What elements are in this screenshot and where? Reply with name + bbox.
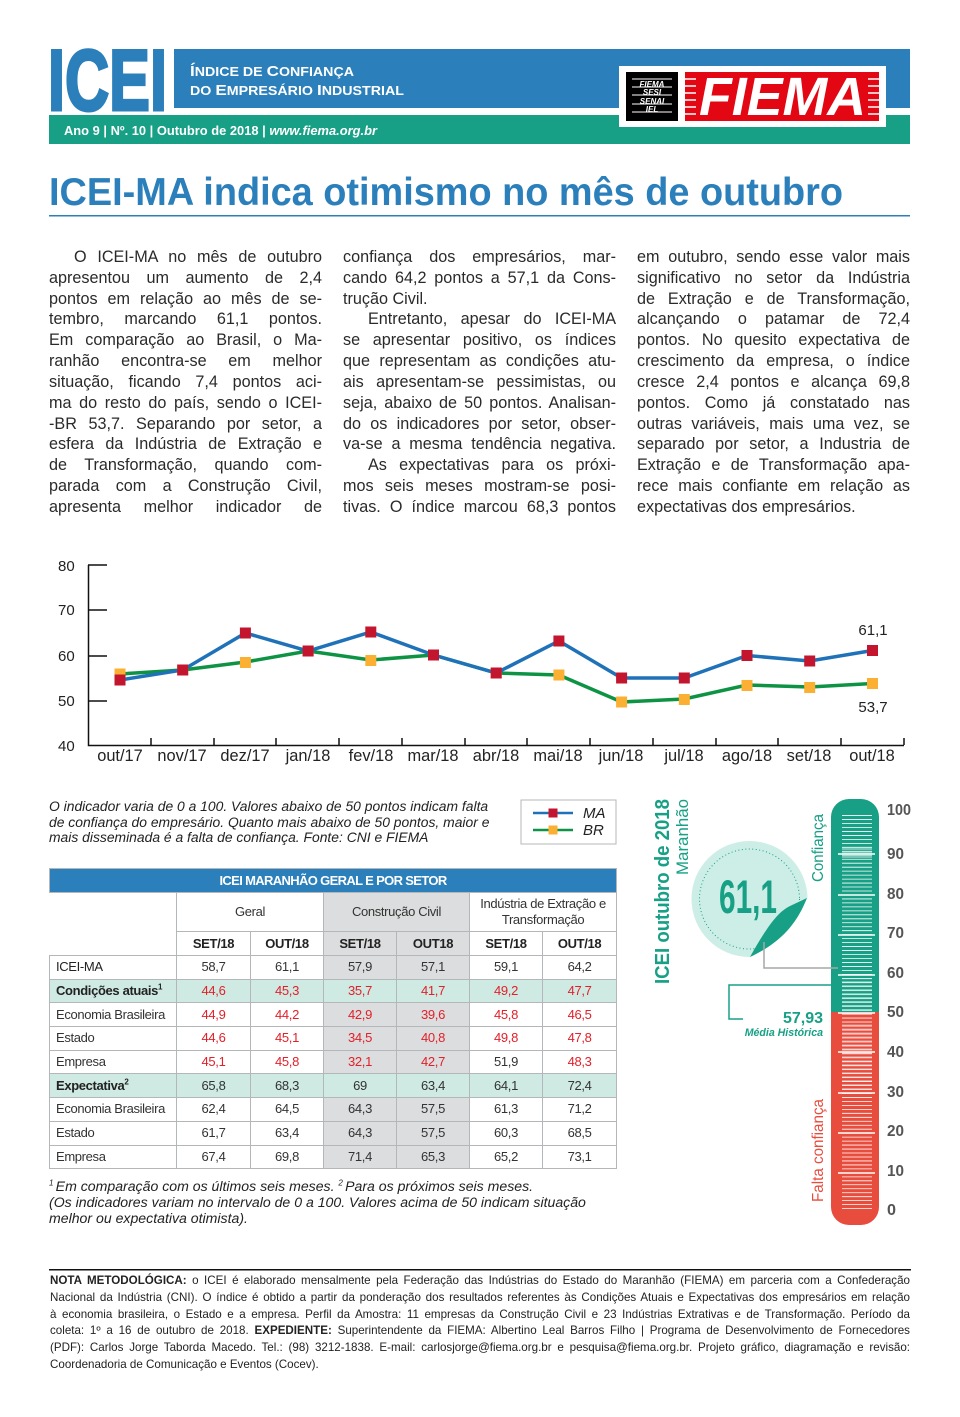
article column 1: situação, ficando 7,4 pontos aci- [49, 373, 322, 391]
x axis labels: out/17 [97, 747, 143, 765]
table: ICEI Maranhão by sector: 69 [353, 1078, 367, 1093]
article column 3: Extração e de Transformação apa- [637, 456, 910, 474]
divider [49, 1269, 911, 1270]
scale numbers: 100 [887, 802, 911, 819]
methodology note [50, 1273, 910, 1371]
rotated panel titles [652, 799, 692, 984]
article column 2: confiança dos empresários, mar- [343, 248, 616, 266]
table: ICEI Maranhão by sector: 61,1 [275, 959, 299, 974]
scale numbers: 60 [887, 965, 904, 982]
scale numbers: 0 [887, 1202, 896, 1219]
FIEMA logo: FIEMA [640, 80, 665, 89]
table: ICEI Maranhão by sector: 40,8 [421, 1030, 445, 1045]
legend [520, 800, 616, 844]
table: ICEI Maranhão by sector: 64,2 [568, 959, 591, 974]
article column 3: em outubro, sendo esse valor mais [637, 248, 910, 266]
methodology note: coleta: 1º a 16 de outubro de 2018. EXPEDIENTE: Superintendente da FIEMA: Albertino Leal Barros Filho | Programa de Desenvolvimento de Fornecedores [50, 1324, 910, 1337]
main title: ICEI-MA indica otimismo no mês de outubro [49, 171, 843, 214]
table: ICEI Maranhão by sector: 61,3 [494, 1101, 518, 1116]
header banner [48, 40, 910, 144]
thermometer bar [831, 799, 879, 1225]
scale numbers: 70 [887, 925, 904, 942]
scale numbers: 30 [887, 1084, 904, 1101]
article column 2: seja, abaixo de 50 pontos. Analisan- [343, 394, 616, 412]
table: ICEI Maranhão by sector: 60,3 [494, 1125, 518, 1140]
article column 2: trução Civil. [343, 290, 428, 308]
article column 3: outras variáveis, mais uma vez, se [637, 415, 910, 433]
table: ICEI Maranhão by sector: 65,2 [494, 1149, 518, 1164]
table: ICEI Maranhão by sector: 69,8 [275, 1149, 299, 1164]
green edition band [49, 115, 910, 144]
table: ICEI Maranhão by sector: Estado [56, 1030, 94, 1045]
article column 1: parada com a Construção Civil, [49, 477, 322, 495]
connector: historical mean [729, 985, 832, 1019]
table: ICEI Maranhão by sector: 46,5 [568, 1007, 591, 1022]
article column 1: esfera da Indústria de Extração e [49, 435, 322, 453]
table footnotes: melhor ou expectativa otimista). [49, 1210, 248, 1226]
confidence thermometer panel [652, 799, 911, 1225]
article column 3: significativo no setor da Indústria [637, 269, 910, 287]
table: ICEI Maranhão by sector: 49,2 [494, 983, 518, 998]
scale numbers: 10 [887, 1163, 904, 1180]
table: ICEI Maranhão by sector: 62,4 [202, 1101, 225, 1116]
table: ICEI Maranhão by sector: Transformação [502, 912, 584, 927]
table: ICEI Maranhão by sector: 45,1 [275, 1030, 299, 1045]
FIEMA logo [619, 66, 886, 127]
article column 3: pontos. No quesito expectativa de [637, 331, 910, 349]
table: ICEI Maranhão by sector: 45,8 [275, 1054, 299, 1069]
badge: 61,1 [692, 841, 812, 962]
table: ICEI Maranhão by sector: 59,1 [494, 959, 518, 974]
table: ICEI Maranhão by sector: 44,6 [202, 983, 225, 998]
edition line: Ano 9 | Nº. 10 | Outubro de 2018 | www.fiema.org.br [64, 124, 378, 138]
table: ICEI Maranhão by sector: 65,8 [202, 1078, 225, 1093]
article column 3: cresce 2,4 pontos e alcança 69,8 [637, 373, 910, 391]
methodology note: Coordenadoria de Comunicação e Eventos (Cocev). [50, 1358, 319, 1371]
table: ICEI Maranhão by sector: 57,9 [348, 959, 372, 974]
table: ICEI Maranhão by sector: 48,3 [568, 1054, 591, 1069]
axes [88, 565, 904, 746]
table: ICEI Maranhão by sector: 72,4 [568, 1078, 591, 1093]
methodology note: à economia brasileira, o Estado e a empresa. Perfil da Amostra: 11 empresas da Construção Civil e 23 Indústrias Extrativas e de Transformação. Período da [50, 1308, 910, 1321]
y axis labels: 80 [58, 558, 75, 575]
article column 2: que representam as condições atu- [343, 352, 616, 370]
table: ICEI Maranhão by sector: 71,4 [348, 1149, 372, 1164]
article column 3: crescimento da empresa, o índice [637, 352, 910, 370]
article column 1: ranhão encontra-se em melhor [49, 352, 322, 370]
FIEMA logo: IEL [646, 105, 658, 114]
article column 1: apresenta melhor indicador de [49, 498, 322, 516]
table: ICEI Maranhão by sector: 68,3 [275, 1078, 299, 1093]
table: ICEI Maranhão by sector: 68,5 [568, 1125, 591, 1140]
final value labels: 61,1 [858, 622, 888, 639]
table: ICEI Maranhão by sector: 58,7 [202, 959, 225, 974]
blue title band [174, 49, 910, 108]
article column 1: ma do resto do país, sendo o ICEI- [49, 394, 322, 412]
publication name: DO EMPRESÁRIO INDUSTRIAL [190, 82, 404, 99]
table footnotes: (Os indicadores variam no intervalo de 0 a 100. Valores acima de 50 indicam situação [49, 1194, 586, 1210]
confidence labels: Confiança [810, 814, 827, 882]
table: ICEI Maranhão by sector: Economia Brasileira [56, 1101, 165, 1116]
table: ICEI Maranhão by sector: Expectativa2 [56, 1077, 129, 1093]
scale numbers: 20 [887, 1123, 904, 1140]
article column 1: tembro, marcando 61,1 pontos. [49, 310, 322, 328]
x axis labels: jan/18 [285, 747, 330, 765]
publication name: ÍNDICE DE CONFIANÇA [190, 63, 354, 80]
table: ICEI Maranhão by sector: 64,3 [348, 1101, 372, 1116]
article column 1 [49, 248, 322, 516]
table: ICEI Maranhão by sector: 47,8 [568, 1030, 591, 1045]
y axis labels: 70 [58, 602, 75, 619]
x axis labels: out/18 [849, 747, 895, 765]
FIEMA logo: SENAI [640, 97, 665, 106]
table: ICEI Maranhão by sector: OUT/18 [558, 936, 601, 950]
table: ICEI Maranhão by sector: 67,4 [202, 1149, 225, 1164]
table: ICEI Maranhão by sector: 45,3 [275, 983, 299, 998]
article column 1: pontos em relação ao mês de se- [49, 290, 322, 308]
methodology note: NOTA METODOLÓGICA: o ICEI é elaborado mensalmente pela Federação das Indústrias do Estado do Maranhão (FIEMA) em parceria com a Confederação [50, 1274, 910, 1287]
table: ICEI Maranhão by sector: 44,2 [275, 1007, 299, 1022]
article column 2: cando 64,2 pontos a 57,1 da Cons- [343, 269, 616, 287]
chart note: mais disseminada é a falta de confiança. Fonte: CNI e FIEMA [49, 829, 428, 845]
table: ICEI Maranhão by sector: 32,1 [348, 1054, 372, 1069]
legend: BR [583, 822, 604, 839]
article column 1: apresentou um aumento de 2,4 [49, 269, 322, 287]
x axis labels: mar/18 [407, 747, 459, 765]
scale numbers: 90 [887, 846, 904, 863]
article column 2 [343, 248, 616, 516]
table: ICEI Maranhão by sector [49, 868, 617, 1169]
table: ICEI Maranhão by sector: SET/18 [485, 936, 527, 950]
table: ICEI Maranhão by sector: Indústria de Extração e [480, 896, 606, 911]
table: ICEI Maranhão by sector: SET/18 [339, 936, 381, 950]
x axis labels: abr/18 [473, 747, 519, 765]
table: ICEI Maranhão by sector: Construção Civil [352, 904, 441, 919]
article column 1: de Transformação, quando com- [49, 456, 322, 474]
table footnotes [49, 1178, 586, 1226]
table: ICEI Maranhão by sector: 71,2 [568, 1101, 591, 1116]
scale numbers [887, 802, 911, 1219]
line chart: ICEI MA vs BR [58, 558, 905, 765]
BR series [114, 646, 878, 708]
x axis labels: ago/18 [722, 747, 772, 765]
article column 1: O ICEI-MA no mês de outubro [74, 248, 322, 266]
article column 3: separado por setor, a Industria de [637, 435, 910, 453]
article column 2: do os indicadores por setor, obser- [343, 415, 616, 433]
table: ICEI Maranhão by sector: 63,4 [275, 1125, 299, 1140]
table: ICEI Maranhão by sector: OUT/18 [265, 936, 309, 950]
table: ICEI Maranhão by sector: Geral [235, 904, 265, 919]
table: ICEI Maranhão by sector: 57,5 [421, 1101, 445, 1116]
final value labels [858, 622, 888, 716]
article column 3 [637, 248, 910, 516]
table: ICEI Maranhão by sector: ICEI MARANHÃO GERAL E POR SETOR [219, 872, 447, 888]
x axis labels: jul/18 [663, 747, 704, 765]
y axis labels: 40 [58, 738, 75, 755]
historical mean label: Média Histórica [745, 1027, 823, 1039]
table: ICEI Maranhão by sector: 51,9 [494, 1054, 518, 1069]
table: ICEI Maranhão by sector: 57,5 [421, 1125, 445, 1140]
table: ICEI Maranhão by sector: 64,5 [275, 1101, 299, 1116]
y axis labels: 50 [58, 693, 75, 710]
chart note: O indicador varia de 0 a 100. Valores abaixo de 50 pontos indicam falta [49, 798, 488, 814]
table: ICEI Maranhão by sector: Economia Brasileira [56, 1007, 165, 1022]
x axis labels: mai/18 [533, 747, 583, 765]
table: ICEI Maranhão by sector: 45,1 [202, 1054, 225, 1069]
article column 2: se apresentar positivo, os índices [343, 331, 616, 349]
article column 2: ais apresentam-se pessimistas, ou [343, 373, 616, 391]
table: ICEI Maranhão by sector: 64,3 [348, 1125, 372, 1140]
table: ICEI Maranhão by sector: 63,4 [421, 1078, 445, 1093]
methodology note: (PDF): Carlos Jorge Taborda Macedo. Tel.: (98) 3212-1838. E-mail: carlosjorge@fiema.org.br e pesquisa@fiema.org.br. Projeto gráfico, diagramação e revisão: [50, 1341, 910, 1354]
table: ICEI Maranhão by sector: 57,1 [421, 959, 445, 974]
article column 2: mos seis meses mostram-se posi- [343, 477, 616, 495]
table: ICEI Maranhão by sector: 34,5 [348, 1030, 372, 1045]
table: ICEI Maranhão by sector: 65,3 [421, 1149, 445, 1164]
x axis labels: jun/18 [598, 747, 643, 765]
article column 2: As expectativas para os próxi- [368, 456, 616, 474]
table: ICEI Maranhão by sector: 49,8 [494, 1030, 518, 1045]
table: ICEI Maranhão by sector: 64,1 [494, 1078, 518, 1093]
confidence labels: Falta confiança [810, 1099, 827, 1202]
final value labels: 53,7 [858, 699, 888, 716]
table: ICEI Maranhão by sector: 42,9 [348, 1007, 372, 1022]
article column 2: Entretanto, apesar do ICEI-MA [368, 310, 616, 328]
methodology note: Nacional da Indústria (CNI). O índice é obtido a partir da ponderação dos resultados referentes às Condições Atuais e Expectativas dos empresários em relação [50, 1291, 910, 1304]
table: ICEI Maranhão by sector: 35,7 [348, 983, 372, 998]
article column 3: alcançando o patamar de 72,4 [637, 310, 910, 328]
x axis labels: set/18 [787, 747, 831, 765]
historical mean label [745, 1010, 823, 1039]
confidence labels [810, 814, 827, 1202]
table: ICEI Maranhão by sector: Empresa [56, 1054, 106, 1069]
x axis labels: dez/17 [220, 747, 270, 765]
legend: MA [583, 805, 606, 822]
table: ICEI Maranhão by sector: 41,7 [421, 983, 445, 998]
table: ICEI Maranhão by sector: 61,7 [202, 1125, 225, 1140]
table: ICEI Maranhão by sector: Empresa [56, 1149, 106, 1164]
article column 2: tivas. O índice marcou 68,3 pontos [343, 498, 616, 516]
table: ICEI Maranhão by sector: 39,6 [421, 1007, 445, 1022]
article column 1: Em comparação ao Brasil, o Ma- [49, 331, 322, 349]
historical mean label: 57,93 [783, 1010, 823, 1027]
scale numbers: 80 [887, 886, 904, 903]
table: ICEI Maranhão by sector: 44,9 [202, 1007, 225, 1022]
table: ICEI Maranhão by sector: 44,6 [202, 1030, 225, 1045]
table footnotes: 1 Em comparação com os últimos seis meses. 2 Para os próximos seis meses. [49, 1178, 533, 1194]
table: ICEI Maranhão by sector: 73,1 [568, 1149, 591, 1164]
table: ICEI Maranhão by sector: Estado [56, 1125, 94, 1140]
scale numbers: 40 [887, 1044, 904, 1061]
y axis labels: 60 [58, 648, 75, 665]
MA series [114, 626, 878, 686]
FIEMA logo: FIEMA [699, 67, 866, 127]
badge: 61,1: 61,1 [719, 870, 777, 923]
connector: current value [764, 942, 838, 968]
x axis labels: nov/17 [157, 747, 207, 765]
FIEMA logo: SESI [643, 88, 662, 97]
rotated panel titles: ICEI outubro de 2018 [652, 799, 674, 984]
table: ICEI Maranhão by sector: OUT18 [413, 936, 453, 950]
scale numbers: 50 [887, 1004, 904, 1021]
x axis labels: fev/18 [349, 747, 393, 765]
table: ICEI Maranhão by sector: Condições atuais1 [56, 983, 162, 998]
article column 3: rece mais confiante em relação as [637, 477, 910, 495]
chart note: de confiança do empresário. Quanto mais abaixo de 50 pontos, maior e [49, 814, 489, 830]
table: ICEI Maranhão by sector: ICEI-MA [56, 959, 103, 974]
publication name [190, 63, 404, 99]
table: ICEI Maranhão by sector: 47,7 [568, 983, 591, 998]
y axis labels [58, 558, 75, 755]
rotated panel titles: Maranhão [674, 799, 692, 875]
table: ICEI Maranhão by sector: SET/18 [193, 936, 234, 950]
article column 3: pontos. Como já constatado nas [637, 394, 910, 412]
article column 1: -BR 53,7. Separando por setor, a [49, 415, 322, 433]
article column 3: expectativas dos empresários. [637, 498, 856, 516]
chart note [49, 798, 489, 845]
table: ICEI Maranhão by sector: 42,7 [421, 1054, 445, 1069]
table: ICEI Maranhão by sector: 45,8 [494, 1007, 518, 1022]
x axis labels [97, 747, 895, 765]
scale ticks [838, 813, 875, 1209]
article column 2: va-se a mesma tendência negativa. [343, 435, 616, 453]
article column 3: de Extração e de Transformação, [637, 290, 910, 308]
